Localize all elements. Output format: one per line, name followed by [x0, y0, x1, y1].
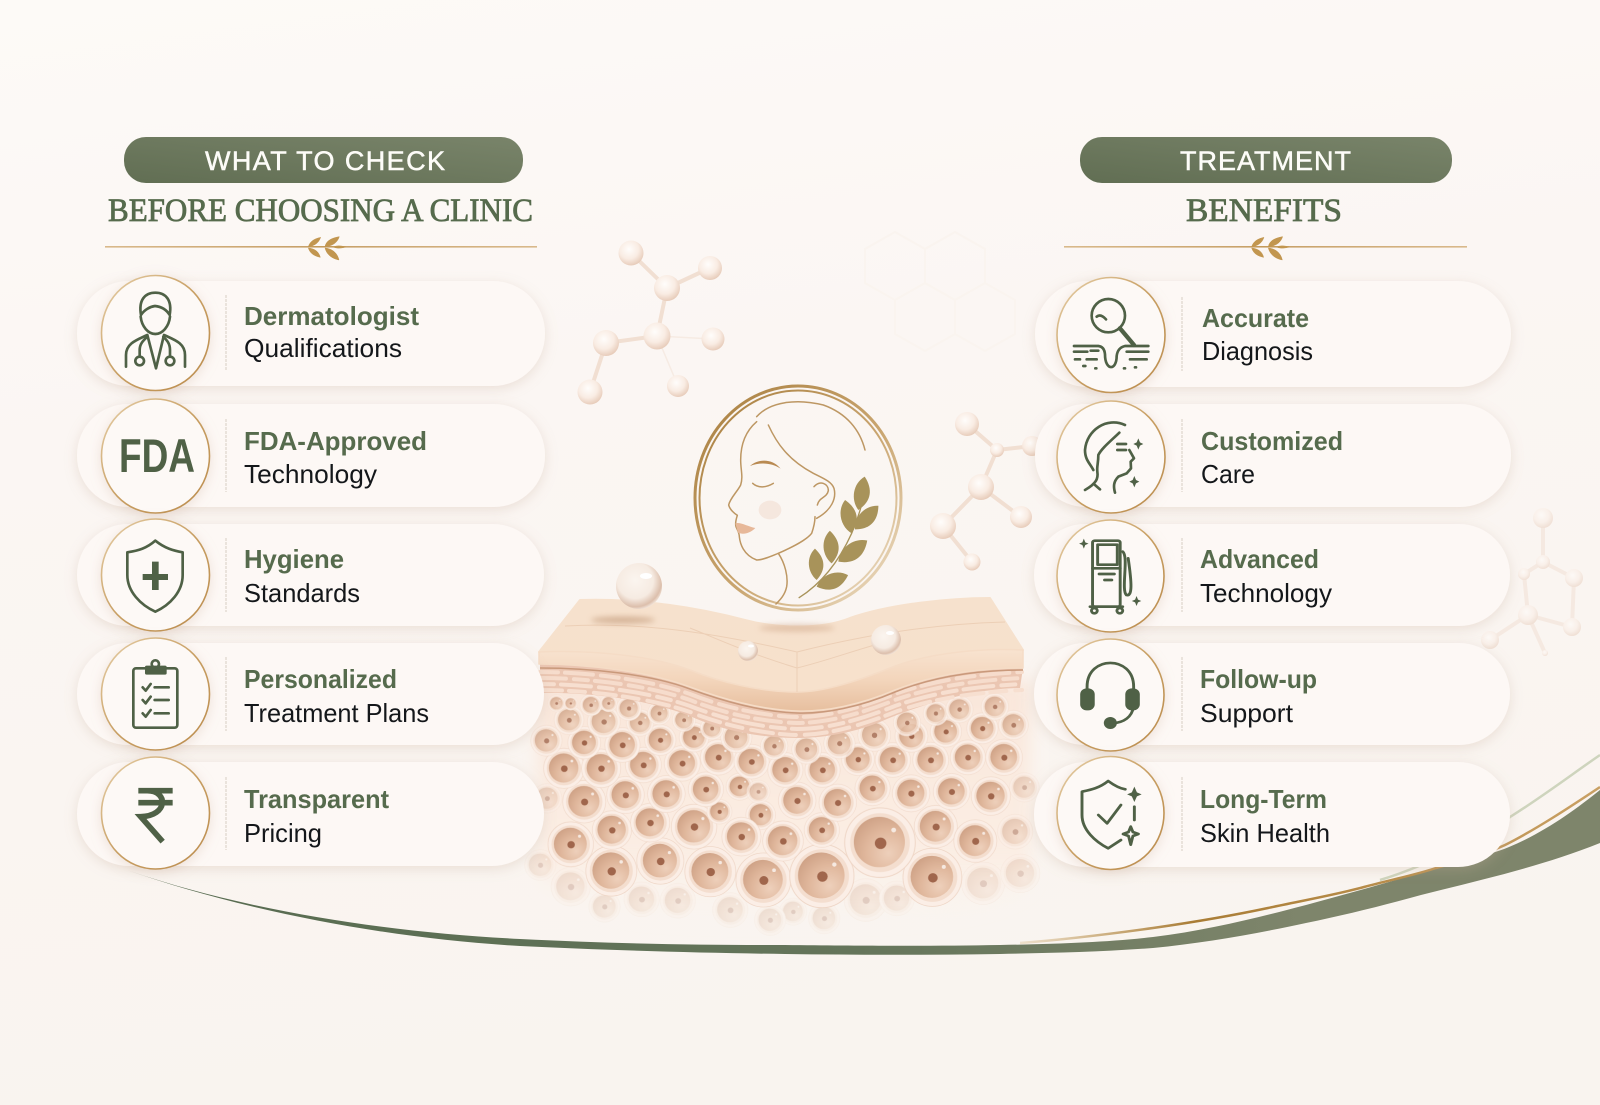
- molecule: far right faint: [1481, 508, 1583, 656]
- stratified skin band: [540, 664, 1023, 738]
- right heading block: [1064, 137, 1467, 260]
- faint hexagon pattern: [865, 232, 1015, 351]
- panel: hygiene standards: [77, 519, 544, 631]
- left heading block: [105, 137, 537, 260]
- panel: fda-approved technology: FDA-Approved: [244, 426, 427, 456]
- panel: fda-approved technology: [77, 399, 545, 513]
- heading pill: treatment: TREATMENT: [1180, 146, 1351, 176]
- face medallion: [695, 386, 901, 610]
- panel: long-term skin health: [1034, 756, 1510, 870]
- icon: clipboard checklist: [133, 660, 177, 728]
- panel: accurate diagnosis: [1035, 278, 1511, 392]
- panel: personalized treatment plans: Personalized: [244, 664, 397, 694]
- panel: personalized treatment plans: [77, 638, 544, 750]
- icon: doctor: [126, 293, 185, 368]
- panel: dermatologist qualifications: Dermatologist: [244, 301, 419, 331]
- pearls: [616, 563, 901, 661]
- icon: rupee: [138, 791, 173, 842]
- skin top slab: [539, 598, 1023, 692]
- panel: personalized treatment plans: Treatment Plans: [244, 698, 429, 728]
- panel: advanced technology: [1034, 520, 1510, 632]
- heading pill: what to check: WHAT TO CHECK: [205, 146, 445, 176]
- panel: follow-up support: [1034, 639, 1510, 751]
- subheading: BEFORE CHOOSING A CLINIC: [108, 193, 533, 229]
- panel: follow-up support: Support: [1200, 698, 1294, 728]
- panel: fda-approved technology: Technology: [244, 459, 377, 489]
- woman profile: [729, 402, 883, 604]
- panel: hygiene standards: Hygiene: [244, 544, 344, 574]
- panel: long-term skin health: Skin Health: [1200, 818, 1330, 848]
- panel: customized care: Customized: [1201, 426, 1343, 456]
- panel: transparent pricing: Transparent: [244, 784, 389, 814]
- skin cells: [525, 693, 1040, 935]
- panel: transparent pricing: [77, 757, 544, 869]
- gold double ring: [695, 386, 901, 610]
- icon: laser machine: [1079, 539, 1141, 613]
- divider with leaf ornament: [105, 237, 537, 260]
- icon: magnifier over skin: [1074, 299, 1148, 368]
- panel: advanced technology: Technology: [1200, 578, 1332, 608]
- slab surface creases: [565, 622, 1005, 692]
- panel: customized care: Care: [1201, 459, 1255, 489]
- panel: dermatologist qualifications: [77, 276, 545, 390]
- panel: follow-up support: Follow-up: [1200, 664, 1317, 694]
- panel: hygiene standards: Standards: [244, 578, 360, 608]
- cell layer backing: [535, 680, 1030, 925]
- subheading: BENEFITS: [1186, 193, 1342, 229]
- icon: face with sparkles: [1085, 422, 1143, 493]
- heading pill: treatment: [1080, 137, 1452, 183]
- icon: shield with check: [1082, 781, 1142, 848]
- heading pill: what to check: [124, 137, 523, 183]
- slab under-edge line: [540, 668, 1023, 713]
- panel: transparent pricing: Pricing: [244, 818, 322, 848]
- panel: accurate diagnosis: Accurate: [1202, 303, 1309, 333]
- molecule: top centre: [578, 240, 724, 404]
- slab front edge: [539, 650, 1023, 711]
- skin cross-section illustration: [525, 563, 1040, 935]
- panel: advanced technology: Advanced: [1200, 544, 1319, 574]
- molecule: right of medallion: [930, 412, 1042, 570]
- decorative swoosh: [113, 755, 1600, 955]
- divider with leaf ornament: [1064, 237, 1467, 260]
- icon: headset: [1080, 663, 1140, 729]
- panel: dermatologist qualifications: Qualifications: [244, 333, 402, 363]
- icon: shield with cross: [127, 541, 183, 612]
- icon: fda logo: FDA: [119, 429, 195, 482]
- panel: long-term skin health: Long-Term: [1200, 784, 1327, 814]
- shadows on slab: [591, 616, 655, 624]
- panel: accurate diagnosis: Diagnosis: [1202, 336, 1313, 366]
- panel: customized care: [1035, 401, 1511, 513]
